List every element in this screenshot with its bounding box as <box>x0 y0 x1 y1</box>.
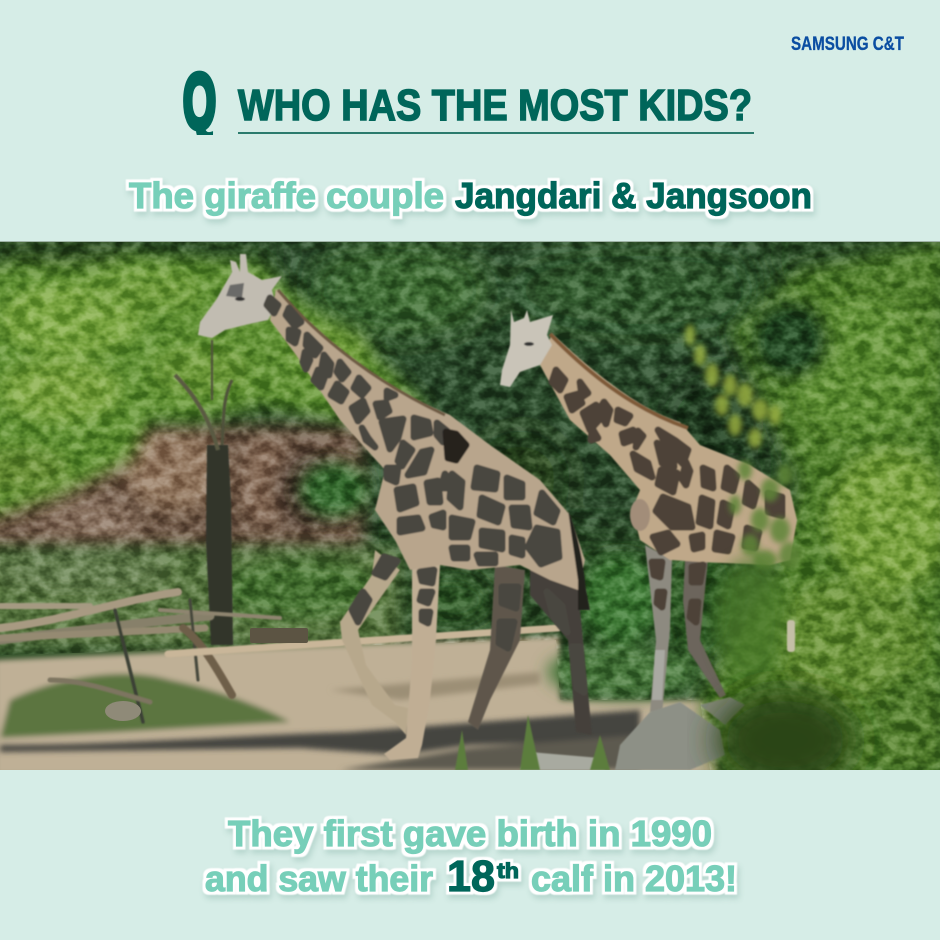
front giraffe lifted leg <box>340 550 408 735</box>
rear giraffe far legs <box>683 560 726 698</box>
front giraffe rear legs <box>468 565 525 730</box>
scenery: concrete wall <box>0 425 365 550</box>
photo top edge <box>0 241 940 242</box>
scenery: pale stick in the bush <box>787 620 795 652</box>
rear giraffe body and neck <box>540 333 797 565</box>
scenery: rock by fence <box>105 701 141 721</box>
subheading: giraffe couple names <box>129 175 812 216</box>
scenery: leaf texture overlay <box>0 241 940 770</box>
giraffe: Jangsoon (rear giraffe) <box>500 310 797 715</box>
rear giraffe leg markings <box>652 650 665 700</box>
scenery: tree trunk <box>175 340 233 645</box>
rear giraffe head <box>500 310 553 387</box>
scenery: dark conifers <box>302 242 774 492</box>
scenery: sandy ground <box>0 636 720 775</box>
scenery: foliage below rear giraffe rump <box>714 558 786 682</box>
rear giraffe mane <box>550 334 688 428</box>
scenery: shrubs behind giraffes <box>547 540 740 698</box>
front giraffe crown and eye <box>226 283 244 298</box>
subheading dark names: Jangdari & Jangsoon <box>455 175 812 216</box>
front giraffe tail <box>568 510 590 610</box>
scenery: dark base of the bush <box>715 690 855 790</box>
scenery: feed tub <box>250 628 308 643</box>
caption ordinal th: th <box>497 860 519 883</box>
caption line 2 end: calf in 2013! <box>531 858 737 899</box>
scenery: grass strip <box>0 462 490 648</box>
rear giraffe shoulder bump <box>630 499 650 531</box>
front giraffe head <box>198 254 282 338</box>
scenery: light green tree canopy <box>0 238 430 520</box>
Q letter mark: Q <box>183 57 216 145</box>
rear giraffe patches <box>552 370 782 622</box>
scenery: leaves over rear giraffe <box>685 324 801 570</box>
scenery: ground shadows <box>0 672 640 770</box>
rear giraffe eye <box>524 342 534 346</box>
scenery: rocks in the foreground <box>520 697 745 770</box>
heading: question <box>183 70 754 135</box>
photo: two giraffes walking in a zoo enclosure <box>0 230 940 790</box>
brand logo: Samsung C&T: SAMSUNG C&T <box>791 34 904 55</box>
question underline <box>238 132 754 134</box>
caption: first birth and 18th calf <box>205 813 737 901</box>
scenery: grass tufts in front of rocks <box>455 715 610 770</box>
scenery: wooden fence logs <box>0 592 558 722</box>
rear giraffe near leg <box>645 545 672 715</box>
question text: WHO HAS THE MOST KIDS? <box>238 81 752 130</box>
front giraffe patches <box>262 294 564 652</box>
front giraffe mane <box>278 290 445 415</box>
caption line 2 start: and saw their <box>205 858 433 899</box>
giraffe: Jangdari (front giraffe) <box>198 254 592 760</box>
caption number 18: 18 <box>447 852 495 901</box>
photo backdrop: forest <box>0 241 940 770</box>
caption line 1: They first gave birth in 1990 <box>228 813 712 854</box>
front giraffe eye <box>235 297 245 301</box>
subheading mint text: The giraffe couple <box>129 175 444 216</box>
scenery: bright green bush on the right <box>700 240 940 780</box>
front giraffe standing leg <box>384 565 440 760</box>
front giraffe body and neck <box>270 289 585 590</box>
